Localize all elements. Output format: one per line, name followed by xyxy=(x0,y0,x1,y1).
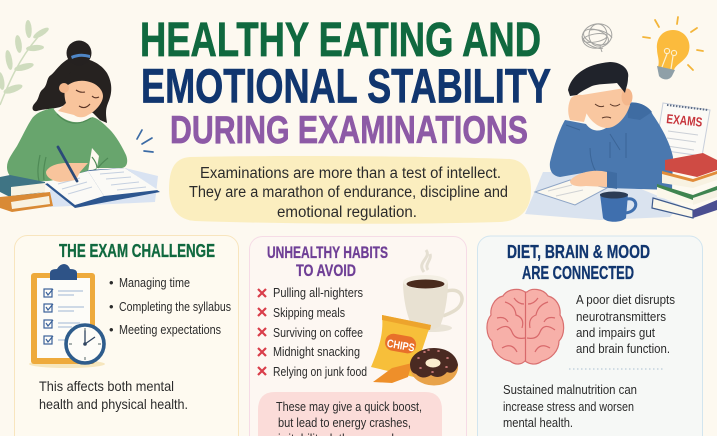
panel: diet, brain and mood xyxy=(478,236,702,436)
chips label: CHIPS xyxy=(386,338,415,354)
heading: diet, brain and mood: DIET, BRAIN & MOOD xyxy=(507,242,650,262)
intro text: They are a marathon of endurance, discipline and xyxy=(189,184,508,201)
callout: consequences xyxy=(258,392,442,436)
writing hand xyxy=(570,171,608,187)
list: exam pressures xyxy=(109,275,231,337)
text: malnutrition xyxy=(503,382,637,430)
stacked books xyxy=(0,175,53,212)
icon: brain xyxy=(487,289,564,364)
list: exam pressures: Meeting expectations xyxy=(119,322,221,337)
list: habits with cross marks xyxy=(258,285,367,379)
boy hair xyxy=(568,62,628,96)
title line 3: DURING EXAMINATIONS xyxy=(170,109,528,152)
hair fringe xyxy=(62,69,106,92)
text: effects: health and physical health. xyxy=(39,396,188,412)
hoodie xyxy=(550,102,673,190)
panel: unhealthy habits xyxy=(250,236,466,436)
text: poor diet: A poor diet disrupts xyxy=(576,292,675,307)
icon: leafy branch xyxy=(0,20,50,105)
heading: the exam challenge: THE EXAM CHALLENGE xyxy=(59,241,215,261)
hand and pen xyxy=(46,147,88,182)
heading: unhealthy habits xyxy=(267,243,388,280)
list: habits with cross marks: Surviving on coffee xyxy=(273,325,363,340)
intro text: Examinations are more than a test of intellect. xyxy=(200,165,501,182)
intro text: emotional regulation. xyxy=(277,204,417,221)
list: exam pressures: • xyxy=(109,299,114,314)
illustration: studying girl xyxy=(0,40,160,212)
ear xyxy=(59,83,69,93)
text: effects xyxy=(39,378,188,412)
list: exam pressures: • xyxy=(109,275,114,290)
icon: chocolate donut xyxy=(410,348,458,386)
list: exam pressures: Managing time xyxy=(119,275,190,290)
hair bun xyxy=(66,40,92,66)
book stack xyxy=(652,153,717,218)
text: malnutrition: increase stress and worsen xyxy=(503,399,634,414)
face xyxy=(582,88,630,128)
desk shadow xyxy=(525,172,680,220)
intro callout xyxy=(169,156,531,224)
text: poor diet: and brain function. xyxy=(576,341,670,356)
heading: diet, brain and mood: ARE CONNECTED xyxy=(522,263,634,283)
text: malnutrition: mental health. xyxy=(503,415,573,430)
list: exam pressures: • xyxy=(109,322,114,337)
heading: unhealthy habits: UNHEALTHY HABITS xyxy=(267,243,388,262)
text: effects: This affects both mental xyxy=(39,378,174,394)
icon: tangled thought scribble xyxy=(579,21,615,52)
closed eyes and mouth xyxy=(595,104,620,118)
notes paper xyxy=(535,180,607,205)
eyes and mouth xyxy=(76,90,99,108)
hair band xyxy=(71,54,90,59)
list: habits with cross marks: Midnight snacking xyxy=(273,344,360,359)
title line 1: HEALTHY EATING AND xyxy=(140,14,541,67)
neck and face xyxy=(58,79,103,117)
heading: unhealthy habits: TO AVOID xyxy=(296,261,356,280)
title xyxy=(140,14,551,152)
text: poor diet: and impairs gut xyxy=(576,325,655,340)
intro text xyxy=(189,165,508,221)
list: exam pressures: Completing the syllabus xyxy=(119,299,231,314)
list: habits with cross marks: Relying on junk food xyxy=(273,364,367,379)
notepad label: EXAMS xyxy=(666,111,703,130)
title line 2: EMOTIONAL STABILITY xyxy=(141,60,551,114)
callout: consequences: These may give a quick boost, xyxy=(276,399,422,414)
open book xyxy=(45,168,160,208)
icon: chips bag xyxy=(371,315,431,383)
icon: coffee cup xyxy=(403,250,462,332)
sparkle marks xyxy=(137,130,153,152)
exam notepad xyxy=(658,103,710,156)
text: poor diet xyxy=(576,292,675,356)
cuff xyxy=(607,171,617,189)
icon: clipboard and clock xyxy=(29,264,105,368)
list: habits with cross marks: Skipping meals xyxy=(273,305,345,320)
sweater xyxy=(7,108,127,182)
text: poor diet: neurotransmitters xyxy=(576,309,666,324)
callout: consequences: but lead to energy crashes, xyxy=(278,415,411,430)
mug xyxy=(600,192,636,222)
illustration: tired boy xyxy=(525,62,717,222)
desk shadow xyxy=(50,168,158,207)
text: malnutrition: Sustained malnutrition can xyxy=(503,382,637,397)
supporting hand xyxy=(568,95,590,122)
heading: diet, brain and mood xyxy=(507,242,650,283)
list: habits with cross marks: Pulling all-nighters xyxy=(273,285,363,300)
hair xyxy=(33,58,111,123)
icon: light bulb xyxy=(643,17,703,79)
panel: the exam challenge xyxy=(14,236,238,436)
